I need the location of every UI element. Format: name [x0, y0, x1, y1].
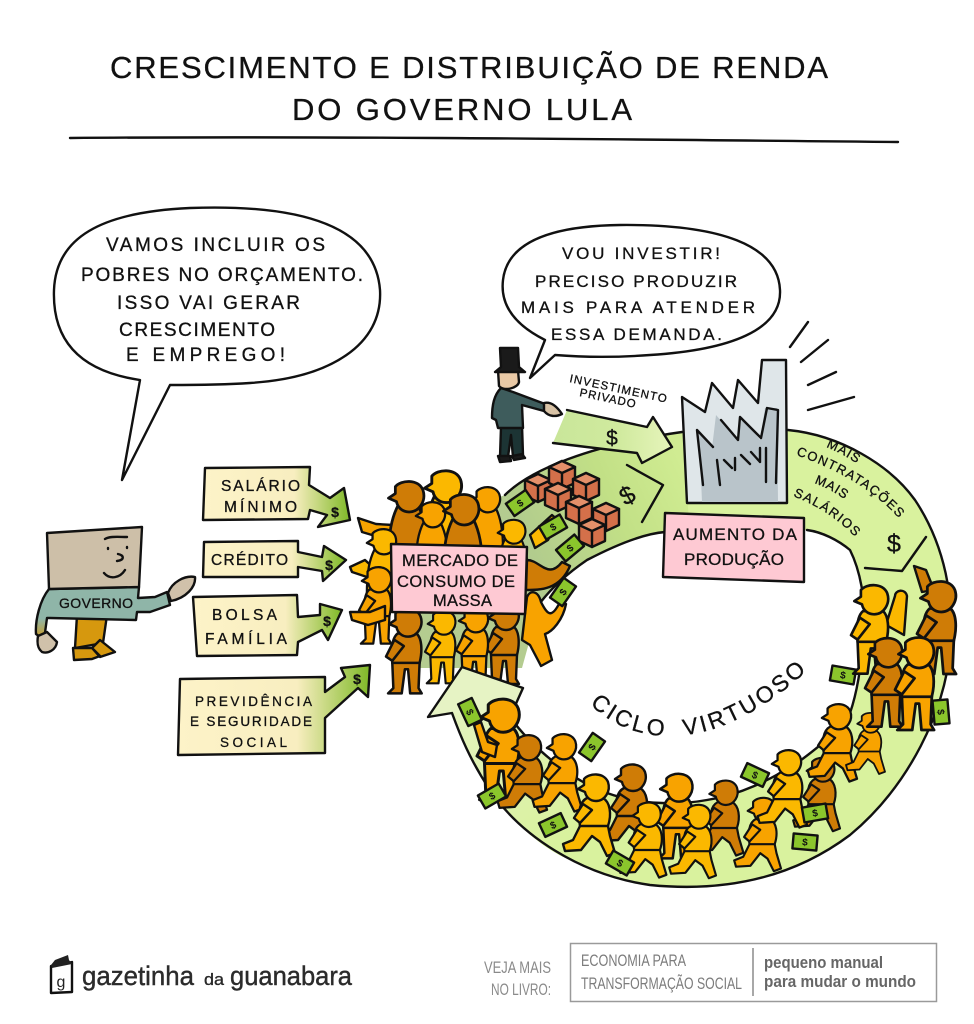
label: governo: GOVERNO	[59, 595, 133, 611]
footer: book reference: para mudar o mundo	[764, 972, 916, 991]
footer: book reference: VEJA MAIS	[484, 958, 551, 977]
box with arrow: previdência e seguridade social	[178, 665, 370, 755]
box: aumento da produção	[663, 513, 804, 582]
footer logo: gazetinha da guanabara: gazetinha	[82, 961, 195, 991]
character: governo	[36, 527, 195, 660]
factory	[682, 360, 787, 503]
footer: book reference	[484, 944, 936, 1002]
box with arrow: crédito: CRÉDITO	[211, 552, 288, 569]
rays from factory	[790, 322, 854, 410]
box with arrow: crédito	[203, 541, 346, 581]
box with arrow: bolsa família: $	[323, 613, 331, 629]
box with arrow: bolsa família: FAMÍLIA	[205, 631, 288, 648]
speech bubble: investidor: VOU INVESTIR!	[562, 244, 720, 263]
box with arrow: salário mínimo	[203, 467, 350, 527]
arrow: chevron inside ring	[614, 465, 663, 522]
box with arrow: salário mínimo: SALÁRIO	[221, 478, 300, 495]
speech bubble: governo: VAMOS INCLUIR OS	[106, 235, 325, 256]
ring labels: mais contratações, mais salários: MAIS	[815, 475, 848, 498]
box: mercado de consumo de massa: CONSUMO DE	[397, 573, 515, 591]
box: mercado de consumo de massa: MERCADO DE	[402, 552, 518, 570]
head	[47, 527, 142, 589]
footer: book reference: NO LIVRO:	[491, 980, 551, 999]
footer logo: gazetinha da guanabara	[51, 955, 353, 993]
hands	[37, 577, 195, 653]
box: mercado de consumo de massa: MASSA	[433, 592, 492, 610]
speech bubble: governo	[54, 208, 380, 480]
arrow: chevron and dollar, right side of ring	[865, 530, 926, 571]
speech bubble: investidor: ESSA DEMANDA.	[551, 325, 722, 344]
box with arrow: bolsa família	[193, 595, 342, 656]
box: aumento da produção: PRODUÇÃO	[684, 550, 784, 569]
speech bubble: governo: E EMPREGO!	[126, 345, 285, 366]
bricks of production	[525, 461, 619, 547]
box: aumento da produção: AUMENTO DA	[673, 525, 798, 544]
torso and arms	[36, 587, 170, 640]
arrow: chevron inside ring: $	[614, 480, 641, 511]
crowd: people walking around the ring	[458, 566, 956, 878]
ring labels: mais contratações, mais salários: SALÁRIOS	[794, 488, 860, 536]
speech bubble: governo: CRESCIMENTO	[119, 320, 275, 341]
footer logo: gazetinha da guanabara: guanabara	[230, 961, 353, 991]
icon: book: g	[57, 974, 65, 991]
box with arrow: previdência e seguridade social: SOCIAL	[220, 735, 287, 750]
footer: book reference: pequeno manual	[764, 953, 883, 972]
footer: book reference: TRANSFORMAÇÃO SOCIAL	[581, 974, 742, 993]
speech bubble: governo: ISSO VAI GERAR	[117, 293, 300, 314]
arrow: investimento privado: INVESTIMENTO	[568, 373, 668, 406]
arrow: chevron and dollar, right side of ring: $	[887, 530, 901, 558]
box with arrow: previdência e seguridade social: E SEGURIDADE	[190, 714, 312, 729]
icon: book	[51, 955, 72, 993]
arrow: investimento privado: PRIVADO	[578, 387, 637, 411]
arrow: investimento privado	[553, 373, 672, 463]
title: DO GOVERNO LULA	[292, 92, 632, 127]
title	[110, 50, 828, 127]
speech bubble: investidor: MAIS PARA ATENDER	[521, 298, 755, 317]
box with arrow: bolsa família: BOLSA	[212, 607, 278, 624]
ring labels: mais contratações, mais salários: MAIS	[826, 440, 860, 462]
label: ciclo virtuoso: CICLO VIRTUOSO	[593, 662, 804, 736]
box with arrow: salário mínimo: MÍNIMO	[224, 499, 297, 516]
box with arrow: salário mínimo: $	[331, 504, 339, 520]
speech bubble: investidor	[503, 225, 780, 378]
title: CRESCIMENTO E DISTRIBUIÇÃO DE RENDA	[110, 50, 828, 85]
virtuous cycle ring	[385, 430, 951, 887]
footer logo: gazetinha da guanabara: da	[204, 970, 225, 989]
speech bubble: governo: POBRES NO ORÇAMENTO.	[81, 265, 363, 286]
box: mercado de consumo de massa	[391, 544, 527, 614]
face	[104, 537, 127, 577]
speech bubble: investidor: PRECISO PRODUZIR	[535, 272, 737, 291]
crowd: mercado de consumo de massa	[350, 471, 584, 693]
investor figure	[492, 348, 562, 462]
box with arrow: previdência e seguridade social: $	[353, 671, 361, 687]
footer: book reference: ECONOMIA PARA	[581, 951, 686, 970]
ring labels: mais contratações, mais salários: CONTRATAÇÕES	[798, 448, 904, 517]
arrow: investimento privado: $	[606, 427, 618, 450]
arrowhead of the ring	[428, 667, 523, 717]
box with arrow: previdência e seguridade social: PREVIDÊNCIA	[195, 694, 312, 709]
legs and shoes	[73, 615, 115, 660]
box with arrow: crédito: $	[325, 557, 333, 573]
